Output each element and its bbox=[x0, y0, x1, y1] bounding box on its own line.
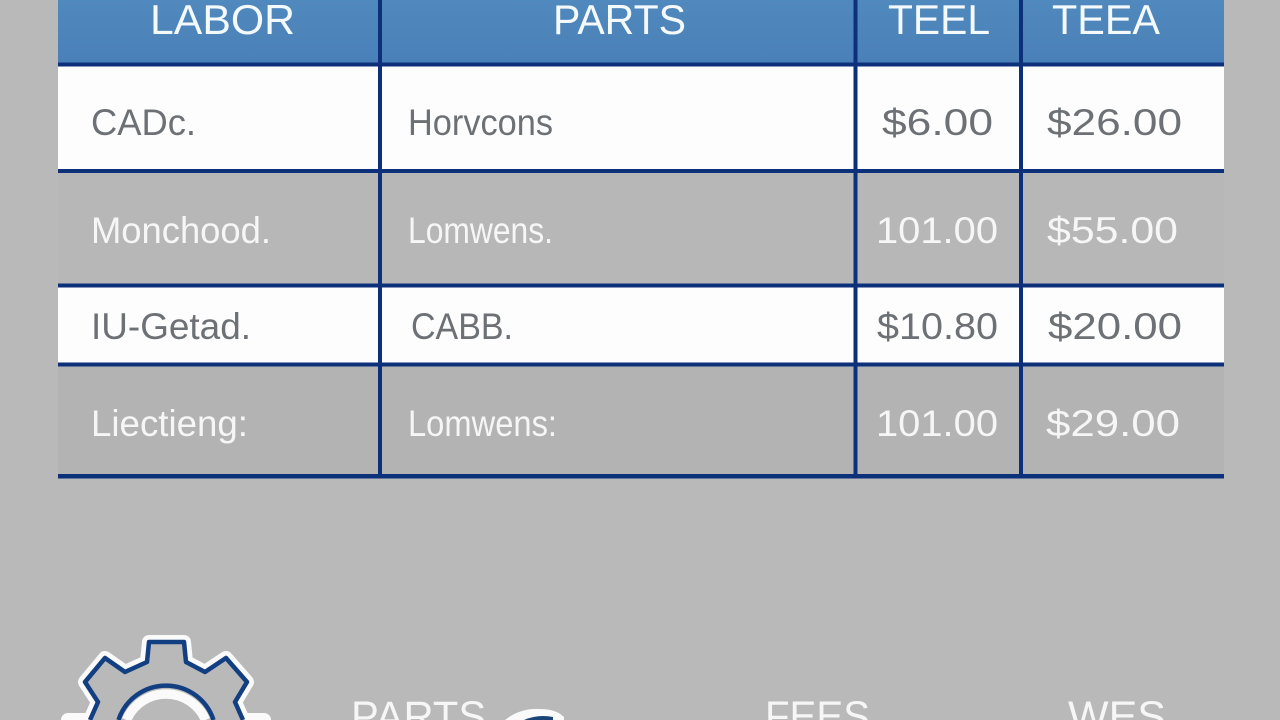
row 3: CABB. bbox=[411, 306, 513, 347]
row 3 bbox=[58, 287, 1224, 363]
table header row bbox=[58, 0, 1224, 64]
row 2: Monchood. bbox=[91, 210, 271, 251]
row 3: $20.00 bbox=[1048, 306, 1182, 347]
row 1: $26.00 bbox=[1047, 102, 1182, 143]
table bbox=[58, 0, 1224, 478]
row 4: Liectieng: bbox=[91, 403, 248, 444]
row 2: 101.00 bbox=[876, 210, 998, 251]
row 2: $55.00 bbox=[1047, 210, 1178, 251]
row 4: $29.00 bbox=[1046, 403, 1180, 444]
row 3: IU-Getad. bbox=[91, 306, 251, 347]
row 1 bbox=[58, 66, 1224, 170]
row 1: $6.00 bbox=[882, 102, 993, 143]
row 2: Lomwens. bbox=[408, 210, 553, 251]
row 1: CADc. bbox=[91, 102, 196, 143]
row 1: Horvcons bbox=[408, 102, 553, 143]
icon: gear bbox=[68, 642, 264, 720]
row 2 bbox=[58, 173, 1224, 283]
row 4: 101.00 bbox=[876, 403, 998, 444]
row 3: $10.80 bbox=[877, 306, 998, 347]
row 4: Lomwens: bbox=[408, 403, 557, 444]
icon: partial round icon bbox=[505, 709, 564, 720]
row 4 bbox=[58, 366, 1224, 474]
